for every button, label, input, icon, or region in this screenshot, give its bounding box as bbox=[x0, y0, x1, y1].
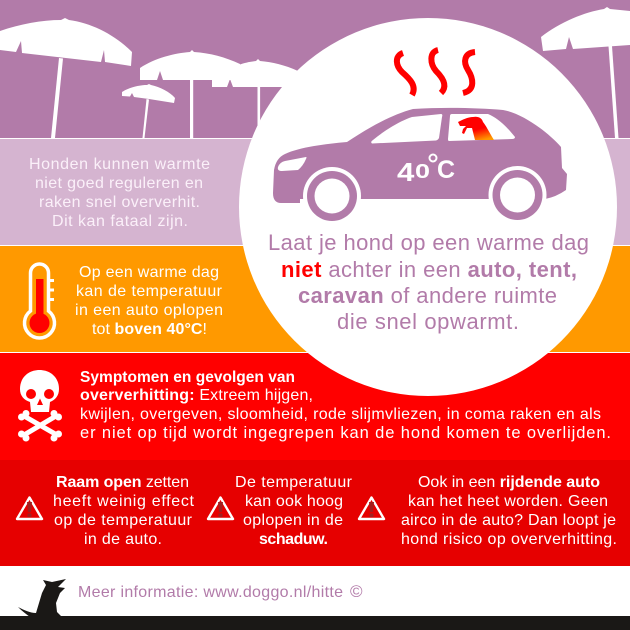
icon: copyright: © bbox=[350, 582, 363, 601]
panel: light purple band bbox=[0, 139, 630, 245]
dog in window bbox=[458, 117, 494, 140]
text: open window bbox=[53, 474, 195, 548]
text: symptoms: kwijlen, overgeven, sloomheid, rode slijmvliezen, in coma raken en als bbox=[80, 406, 601, 423]
icon: third parasol behind circle bbox=[212, 59, 298, 128]
text: open window: in de auto. bbox=[84, 531, 162, 548]
text: temperature in car: kan de temperatuur bbox=[76, 283, 223, 300]
rear wheel bbox=[488, 166, 546, 224]
text: symptoms: er niet op tijd wordt ingegrepen kan de hond komen te overlijden. bbox=[80, 424, 611, 442]
panel: orange band bbox=[0, 246, 630, 352]
temperature label: C bbox=[437, 156, 455, 184]
temperature label bbox=[397, 154, 455, 187]
text: main warning: niet achter in een auto, tent, bbox=[281, 257, 577, 282]
panel: red band bbox=[0, 353, 630, 460]
panel: dark red band bbox=[0, 460, 630, 566]
illustration: heat waves bbox=[397, 50, 475, 95]
front window bbox=[371, 114, 442, 144]
text: main warning: caravan of andere ruimte bbox=[298, 283, 557, 308]
icon: skull and crossbones bbox=[18, 370, 62, 442]
icon: medium parasol bbox=[140, 50, 240, 138]
panel: white circle bbox=[239, 18, 617, 396]
panel: black footer strip bbox=[0, 616, 630, 630]
text: driving car bbox=[401, 474, 617, 548]
text: shade: schaduw. bbox=[259, 531, 328, 548]
temperature label: 4 bbox=[397, 158, 414, 187]
text: symptoms: Symptomen en gevolgen van bbox=[80, 369, 295, 386]
text: temperature in car: Op een warme dag bbox=[79, 264, 219, 281]
icon: warning triangle 3 bbox=[359, 498, 384, 519]
text: dogs cannot regulate heat: niet goed reguleren en bbox=[35, 175, 203, 192]
text: driving car: hond risico op oververhitting. bbox=[401, 531, 617, 548]
text: open window: heeft weinig effect bbox=[53, 493, 195, 510]
text: temperature in car: in een auto oplopen bbox=[75, 302, 223, 319]
headlight bbox=[278, 157, 306, 171]
text: driving car: kan het heet worden. Geen bbox=[408, 493, 608, 510]
icon: warning triangle 1 bbox=[17, 498, 42, 519]
icon: large parasol left bbox=[0, 18, 132, 138]
text: main warning: Laat je hond op een warme dag bbox=[268, 230, 589, 255]
front wheel bbox=[303, 167, 361, 225]
text: shade: De temperatuur bbox=[235, 474, 353, 491]
text: driving car: airco in de auto? Dan loopt je bbox=[401, 512, 616, 529]
icon: parasol right bbox=[541, 7, 630, 138]
text: temperature in car: tot boven 40°C! bbox=[92, 321, 207, 338]
text: shade: oplopen in de bbox=[243, 512, 343, 529]
text: temperature in car bbox=[75, 264, 223, 338]
text: open window: Raam open zetten bbox=[56, 474, 189, 491]
text: main warning: die snel opwarmt. bbox=[337, 309, 519, 334]
text: dogs cannot regulate heat: Dit kan fataal zijn. bbox=[52, 213, 188, 230]
text: open window: op de temperatuur bbox=[54, 512, 193, 529]
text: symptoms: oververhitting: Extreem hijgen, bbox=[80, 387, 313, 404]
text: dogs cannot regulate heat: raken snel oververhit. bbox=[39, 194, 200, 211]
text: shade: kan ook hoog bbox=[245, 493, 343, 510]
icon: small parasol bbox=[122, 84, 175, 138]
panel: sky with parasols bbox=[0, 0, 630, 138]
text: more information: Meer informatie: www.doggo.nl/hitte bbox=[78, 584, 343, 601]
text: main warning bbox=[268, 230, 589, 334]
text: dogs cannot regulate heat bbox=[29, 156, 210, 230]
temperature label: 0 bbox=[415, 160, 430, 183]
text: shade bbox=[235, 474, 353, 548]
icon: dog silhouette bbox=[18, 579, 66, 617]
rear window bbox=[448, 114, 515, 141]
text: symptoms bbox=[80, 369, 611, 442]
icon: warning triangle 2 bbox=[208, 498, 233, 519]
text: dogs cannot regulate heat: Honden kunnen warmte bbox=[29, 156, 210, 173]
text: driving car: Ook in een rijdende auto bbox=[418, 474, 600, 491]
illustration: car with dog bbox=[273, 108, 567, 225]
icon: thermometer bbox=[25, 264, 55, 338]
